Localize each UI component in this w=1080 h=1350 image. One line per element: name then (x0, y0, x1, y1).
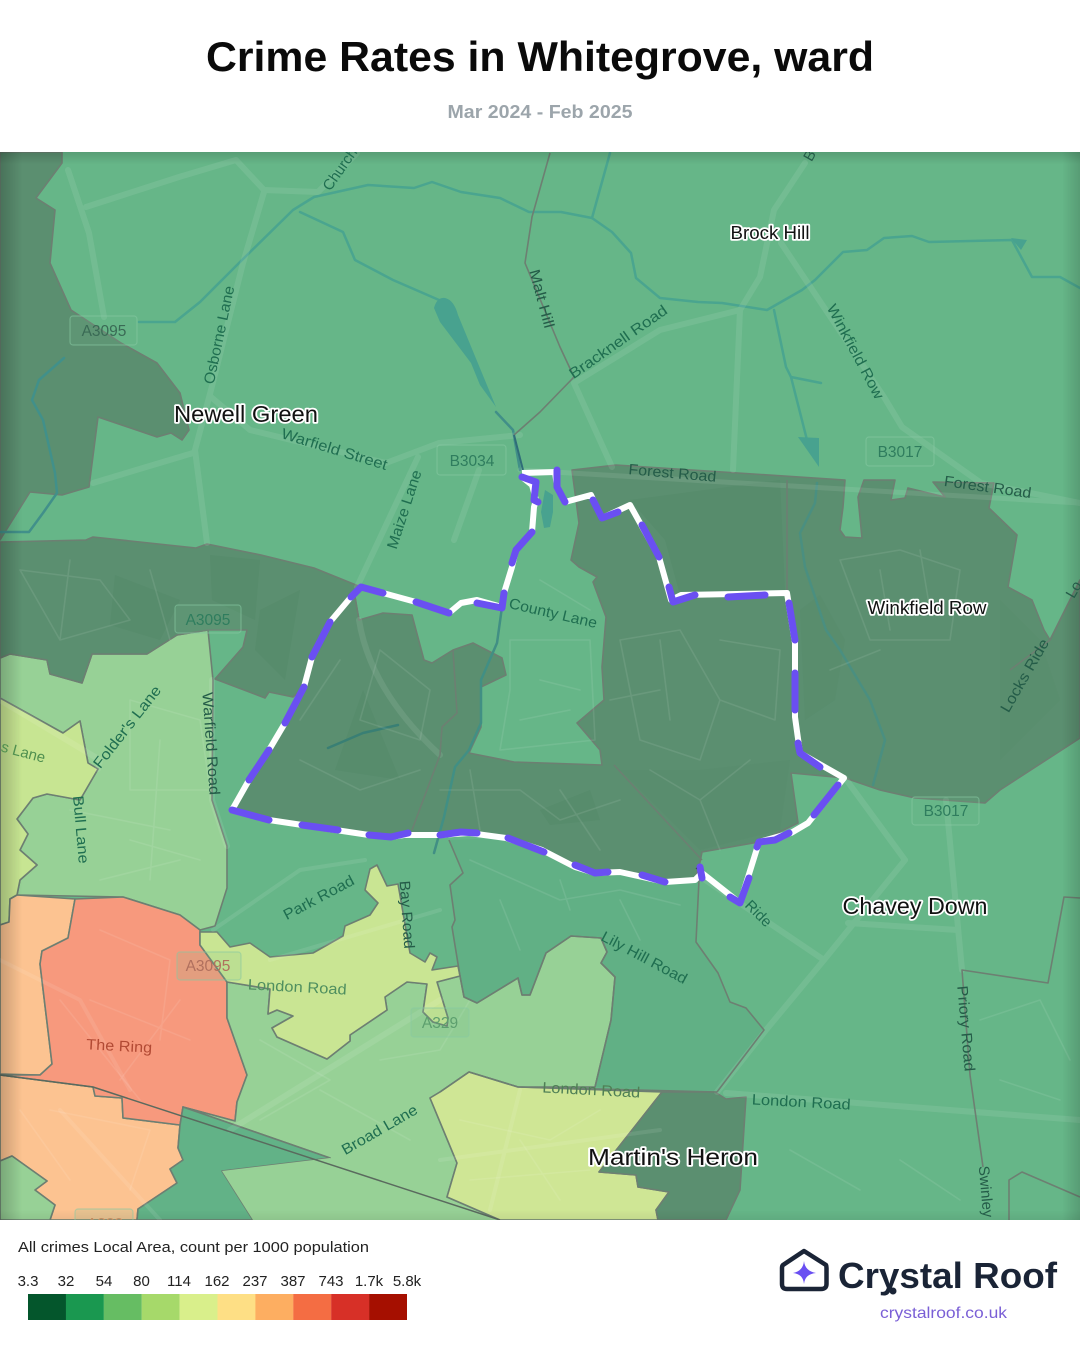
wordmark: Crystal Roof (838, 1255, 1058, 1296)
place labels: Martin's Heron (588, 1144, 758, 1170)
pond east (1011, 238, 1027, 250)
road labels: Priory Road (953, 985, 978, 1072)
road shield labels: B3017 (878, 444, 922, 461)
main roads (0, 153, 1080, 1220)
road labels: London Road (247, 976, 347, 999)
place labels: Winkfield Row (868, 598, 988, 618)
rivers and ponds (0, 153, 1080, 853)
road labels: Bull Lane (69, 795, 92, 864)
legend value labels: 1.7k (355, 1273, 384, 1290)
legend (18, 1239, 422, 1320)
salmon area: The Ring (0, 897, 247, 1125)
road labels (0, 145, 1080, 1219)
base green south-west area (137, 1107, 330, 1220)
dark area west part of ward (232, 465, 1080, 882)
subtitle: date range: Mar 2024 - Feb 2025 (448, 102, 632, 122)
ward boundary: Whitegrove (232, 470, 844, 903)
road labels: Warfield Road (198, 692, 223, 796)
yellow-green far west area (0, 698, 98, 925)
yellow-green central area (200, 865, 460, 1059)
legend title: All crimes Local Area, count per 1000 population (18, 1239, 369, 1256)
peach areas (0, 895, 75, 1075)
road labels: Park Road (280, 872, 357, 924)
place labels: Brock Hill (730, 223, 810, 243)
boundary lines (0, 153, 1080, 1220)
road labels: Bracknell Road (566, 302, 671, 383)
place labels: Chavey Down (842, 893, 988, 919)
road shield labels: B3017 (924, 803, 968, 820)
road labels: Forest Road (628, 461, 717, 486)
logo: Crystal Roof (782, 1251, 1058, 1322)
road shield labels: A322 (87, 1216, 123, 1233)
edge shading (0, 152, 1080, 1220)
road labels: Locks Ride (997, 636, 1053, 716)
road labels: Winkfield Row (823, 302, 887, 402)
road labels: Warfield Street (279, 425, 390, 474)
road labels: Folder's Lane (90, 683, 165, 772)
dark area Martin's Heron (599, 1092, 746, 1220)
legend value labels: 114 (167, 1273, 191, 1290)
road labels: Lily Hill Road (598, 928, 690, 988)
legend value labels: 743 (318, 1273, 344, 1290)
legend value labels: 32 (58, 1273, 74, 1290)
road labels: Osborne Lane (201, 284, 238, 386)
legend colour scale (28, 1294, 407, 1320)
dark band west (0, 537, 361, 698)
road labels: Malt Hill (525, 268, 557, 330)
icon: house with star (782, 1251, 826, 1289)
road labels: Swinley (975, 1165, 996, 1219)
slightly darker base areas (449, 838, 764, 1092)
pond north (798, 437, 819, 467)
road labels: s Lane (0, 739, 47, 767)
legend value labels (18, 1273, 422, 1290)
road shield labels: A329 (422, 1015, 458, 1032)
place labels: Newell Green (174, 401, 318, 427)
light green west area (0, 630, 227, 930)
light green strip (222, 1158, 500, 1220)
road shield labels: A3095 (82, 323, 126, 340)
road labels: Church (319, 145, 361, 194)
road labels: Bay Road (396, 880, 417, 949)
road labels: B (800, 147, 820, 164)
light green central area (183, 936, 615, 1220)
legend value labels: 80 (133, 1273, 150, 1290)
choropleth areas (0, 152, 1080, 1220)
road labels: Maize Lane (384, 468, 425, 551)
pale yellow south area (430, 1072, 669, 1220)
dark area north-west (0, 152, 189, 540)
legend value labels: 387 (280, 1273, 306, 1290)
road labels: London Road (751, 1091, 851, 1114)
road labels: London Road (542, 1079, 641, 1102)
road labels: Ride (741, 897, 775, 931)
website: crystalroof.co.uk (880, 1305, 1008, 1322)
road shield labels: A3095 (186, 958, 230, 975)
road shields (70, 316, 979, 1237)
road labels: Broad Lane (339, 1101, 421, 1159)
road shield labels (82, 323, 968, 1233)
road shield labels: B3034 (450, 453, 495, 470)
darker blocks within dark areas (110, 480, 1060, 850)
place labels (174, 223, 988, 1170)
pond in ward (541, 490, 553, 528)
road labels: County Lane (507, 595, 599, 632)
road labels: The Ring (86, 1036, 153, 1057)
legend value labels: 5.8k (393, 1273, 422, 1290)
wordmark key detail (890, 1288, 896, 1294)
light green south-west corner (0, 1156, 55, 1220)
road labels: Forest Road (943, 473, 1032, 502)
legend value labels: 162 (204, 1273, 230, 1290)
legend value labels: 54 (96, 1273, 112, 1290)
lake north (434, 298, 496, 407)
title: Crime Rates in Whitegrove, ward (206, 33, 874, 80)
residential streets (20, 550, 1070, 1200)
road shield labels: A3095 (186, 612, 230, 629)
legend value labels: 237 (242, 1273, 268, 1290)
legend value labels: 3.3 (18, 1273, 38, 1290)
